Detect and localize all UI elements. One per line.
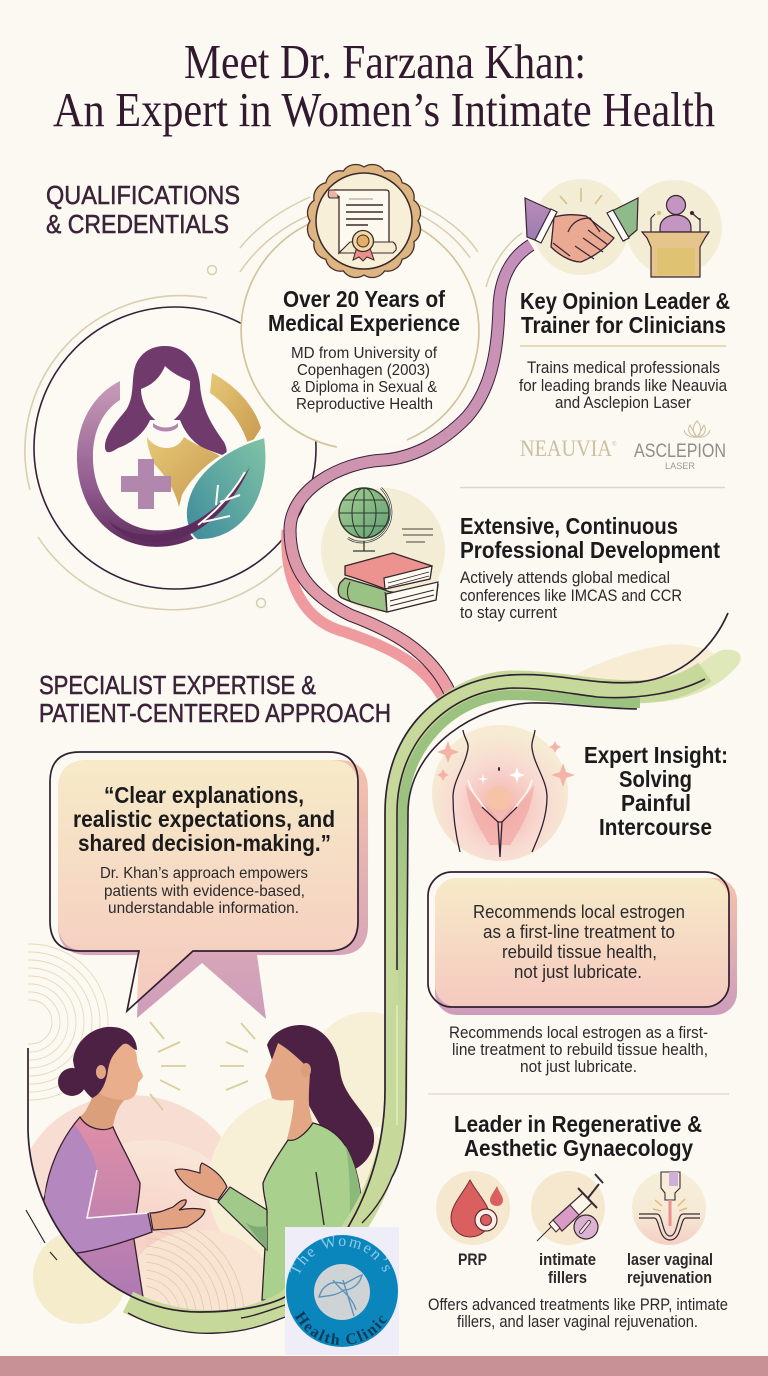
brand logos: Neauvia and Asclepion: ®	[612, 441, 617, 448]
figure: left woman	[44, 1026, 206, 1296]
title	[53, 34, 715, 137]
text: experience body: Reproductive Health	[296, 396, 433, 413]
icon: swoosh ring	[77, 381, 251, 547]
panel: recommendation card: rebuild tissue health,	[502, 942, 657, 962]
quote attribution	[100, 865, 308, 917]
text: recommendation summary: Recommends local estrogen as a first-	[449, 1023, 708, 1042]
brand logos: Neauvia and Asclepion: NEAUVIA	[520, 436, 612, 461]
heading: specialist expertise: PATIENT-CENTERED APPROACH	[39, 698, 391, 728]
quote attribution: patients with evidence-based,	[104, 883, 305, 900]
illustration: two women in conversation	[26, 944, 384, 1324]
footer band	[0, 1356, 768, 1376]
text: professional development: Extensive, Continuous	[460, 513, 678, 539]
heading: qualifications and credentials	[46, 180, 240, 239]
icon labels: rejuvenation	[627, 1268, 712, 1287]
text: experience body: & Diploma in Sexual &	[291, 379, 437, 396]
icon: globe	[339, 488, 391, 551]
icon: woman face	[141, 366, 190, 425]
bubble outline	[50, 752, 358, 1011]
icon: red book	[345, 553, 432, 589]
text: expert insight heading: Intercourse	[599, 814, 712, 840]
text: professional development	[460, 513, 720, 622]
text: recommendation summary: not just lubricate.	[520, 1057, 637, 1076]
panel: recommendation card: Recommends local estrogen	[473, 902, 685, 922]
text: key opinion leader: for leading brands like Neauvia	[519, 376, 727, 395]
title: Meet Dr. Farzana Khan:	[184, 34, 586, 89]
text: key opinion leader: Trainer for Clinicians	[521, 312, 726, 338]
quote attribution: Dr. Khan’s approach empowers	[100, 865, 308, 882]
quote text: “Clear explanations,	[104, 782, 304, 808]
icon: medical cross	[121, 459, 171, 509]
icon: gold arc	[210, 373, 261, 447]
panel: recommendation card: not just lubricate.	[514, 962, 642, 982]
quote text: shared decision-making.”	[78, 830, 331, 856]
text: experience heading: Medical Experience	[268, 310, 460, 336]
icon: globe and books	[321, 488, 445, 612]
text: experience body	[291, 345, 438, 413]
brand logos: Neauvia and Asclepion	[520, 421, 726, 471]
text: advanced treatments: fillers, and laser vaginal rejuvenation.	[457, 1312, 698, 1331]
panel: recommendation card	[428, 872, 737, 1015]
heading: specialist expertise: SPECIALIST EXPERTISE &	[39, 670, 316, 700]
logo: The Women's Health Clinic: The Women’s	[289, 1236, 390, 1274]
icon: speaker at podium	[626, 180, 722, 277]
icon: woman torso	[147, 437, 220, 507]
text: advanced treatments	[428, 1295, 728, 1331]
text: recommendation summary: line treatment to rebuild tissue health,	[452, 1040, 708, 1059]
logo: The Women's Health Clinic	[285, 1227, 399, 1355]
icon: certificate badge	[308, 165, 420, 277]
icon: woman hair	[105, 346, 227, 455]
text: professional development: Professional Development	[460, 537, 720, 563]
bubble shadow and tail	[58, 760, 368, 1019]
panel: over 20 years experience circle	[240, 197, 522, 449]
quote text: realistic expectations, and	[73, 806, 335, 832]
text: recommendation summary	[449, 1023, 708, 1076]
text: advanced treatments: Offers advanced treatments like PRP, intimate	[428, 1295, 728, 1314]
text: regenerative leader heading: Leader in Regenerative &	[454, 1111, 702, 1137]
figure: right woman	[175, 1025, 374, 1300]
doctor profile circle with logo	[25, 266, 316, 610]
text: regenerative leader heading	[454, 1111, 702, 1161]
icon: pelvis illustration	[432, 725, 575, 861]
text: key opinion leader: Trains medical professionals	[527, 358, 720, 377]
arrow: green pathway	[28, 613, 741, 1333]
text: expert insight heading: Solving	[619, 766, 692, 792]
icon: leaf	[186, 437, 266, 540]
text: key opinion leader	[519, 288, 730, 412]
text: key opinion leader: and Asclepion Laser	[555, 393, 691, 412]
icon labels: PRP	[458, 1250, 487, 1269]
icon: laser on tissue	[632, 1171, 706, 1245]
icon labels: intimate	[539, 1250, 596, 1269]
panel: recommendation card: as a first-line treatment to	[483, 922, 675, 942]
brand logos: Neauvia and Asclepion: ASCLEPION	[634, 441, 726, 462]
logo: The Women's Health Clinic: Health Clinic	[294, 1310, 387, 1345]
icon: syringe and pill	[531, 1171, 605, 1245]
icon labels: laser vaginal	[627, 1250, 713, 1269]
heading: qualifications and credentials: QUALIFICATIONS	[46, 180, 240, 210]
arrow: purple pathway	[287, 245, 531, 702]
text: professional development: to stay current	[460, 603, 557, 622]
icon labels	[458, 1250, 713, 1287]
text: professional development: conferences like IMCAS and CCR	[460, 586, 682, 605]
panel: quote speech bubble	[50, 752, 368, 1019]
text: expert insight heading	[584, 742, 728, 840]
text: experience body: MD from University of	[291, 345, 438, 362]
text: experience heading	[268, 286, 460, 336]
text: experience body: Copenhagen (2003)	[297, 362, 430, 379]
heading: specialist expertise	[39, 670, 391, 728]
text: professional development: Actively attends global medical	[460, 568, 670, 587]
text: experience heading: Over 20 Years of	[283, 286, 445, 312]
icon labels: fillers	[548, 1268, 587, 1287]
icon: PRP blood drop	[436, 1171, 510, 1245]
icon: green book	[338, 578, 438, 612]
text: regenerative leader heading: Aesthetic Gynaecology	[464, 1135, 693, 1161]
quote text	[73, 782, 335, 856]
brand logos: Neauvia and Asclepion: LASER	[665, 461, 696, 471]
heading: qualifications and credentials: & CREDENTIALS	[46, 209, 229, 239]
text: key opinion leader: Key Opinion Leader &	[520, 288, 730, 314]
quote attribution: understandable information.	[108, 900, 299, 917]
text: expert insight heading: Painful	[621, 790, 691, 816]
text: expert insight heading: Expert Insight:	[584, 742, 728, 768]
icon: handshake	[525, 179, 638, 275]
